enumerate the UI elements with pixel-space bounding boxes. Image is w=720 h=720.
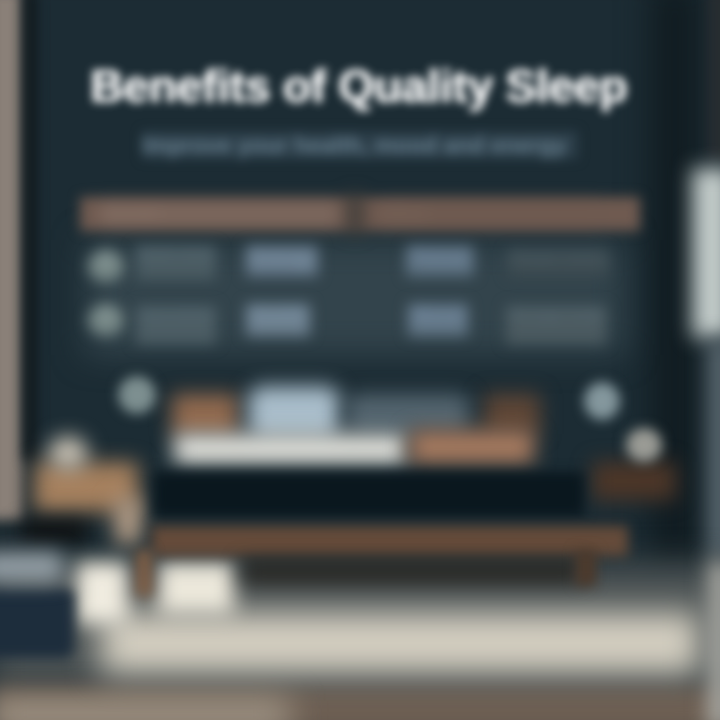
left nightstand leg xyxy=(114,498,142,544)
row 1 col 2 xyxy=(246,246,318,276)
header label left: Benefit xyxy=(100,204,158,223)
row 2 col 3: Mood xyxy=(411,304,465,326)
bed frame xyxy=(152,526,628,556)
row 1 col 3: Focus xyxy=(411,246,469,268)
right lamp xyxy=(626,428,662,462)
wall right shadow xyxy=(650,0,700,570)
ottoman top xyxy=(0,552,64,582)
bed leg left xyxy=(136,550,152,596)
left wall strip xyxy=(0,0,22,520)
icon: right moon xyxy=(584,382,620,420)
pillow blue xyxy=(346,394,470,434)
row 1 col 3 xyxy=(406,246,474,276)
under-bed shadow xyxy=(242,562,582,582)
right lower strip xyxy=(708,340,720,560)
peach blanket xyxy=(410,430,534,464)
header label left xyxy=(100,203,340,225)
row 1 icon xyxy=(88,250,124,282)
dark wall xyxy=(30,0,702,570)
row 2 col 4 xyxy=(506,306,606,344)
ottoman xyxy=(0,588,74,658)
left lamp xyxy=(48,436,88,470)
wooden floor xyxy=(0,686,720,720)
floor xyxy=(0,565,720,685)
row 1 col 4 xyxy=(508,250,608,276)
row 1 note xyxy=(136,246,216,280)
right wall strip xyxy=(708,0,720,160)
mattress xyxy=(154,472,584,516)
table header bar xyxy=(80,197,640,231)
pillow white xyxy=(248,386,340,438)
row 2 col 3 xyxy=(408,304,468,336)
rug corner left xyxy=(76,562,128,624)
row 2 icon xyxy=(88,304,124,336)
left wall dark edge xyxy=(24,0,36,460)
left nightstand shadow xyxy=(22,522,88,540)
table row 1 xyxy=(81,238,610,289)
row 1 col 2: Energy xyxy=(248,246,316,268)
right nightstand xyxy=(592,462,676,500)
row 2 col 2: Health xyxy=(247,304,309,326)
header label right: Effect xyxy=(380,204,427,223)
white sheet xyxy=(174,434,406,464)
subtitle: Improve your health, mood and energy xyxy=(142,132,566,158)
header label right xyxy=(380,203,600,225)
table row 2 xyxy=(81,296,610,348)
headboard right xyxy=(484,394,540,434)
right window panel xyxy=(692,168,720,338)
icon: left moon xyxy=(118,376,156,414)
row 2 note xyxy=(136,306,216,344)
rug xyxy=(100,612,700,674)
table background xyxy=(85,240,625,355)
left nightstand xyxy=(34,462,138,512)
bed leg right xyxy=(576,550,596,586)
bed xyxy=(128,371,635,602)
headboard left xyxy=(172,394,238,436)
title: Benefits of Quality Sleep xyxy=(90,60,627,112)
header divider xyxy=(346,195,364,233)
row 2 col 2 xyxy=(246,304,310,336)
wooden floor left light xyxy=(0,700,290,720)
right floor edge xyxy=(708,560,720,720)
rug corner middle xyxy=(158,562,234,614)
